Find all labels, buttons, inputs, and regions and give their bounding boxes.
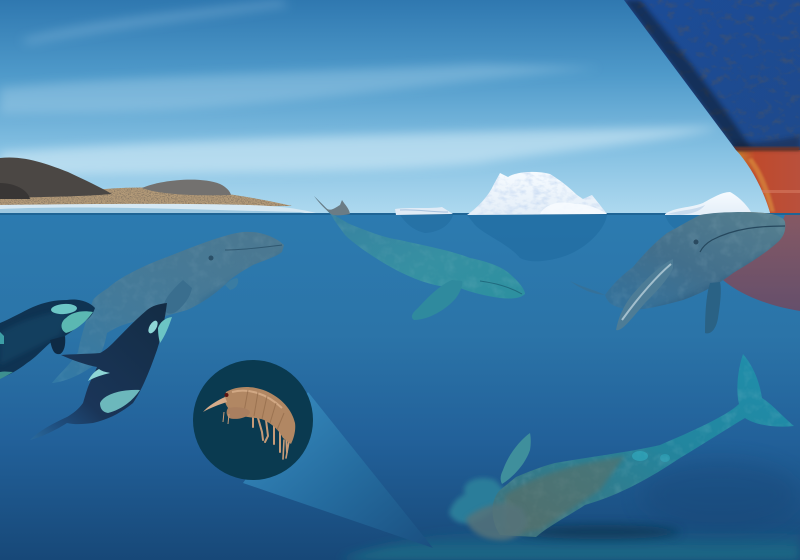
eye patch (51, 303, 77, 315)
eye patch (146, 319, 160, 335)
flipper (412, 280, 462, 320)
stomach remains (466, 504, 527, 540)
sky background (0, 0, 800, 214)
humpback whale right (570, 212, 790, 333)
ship hull below water (723, 215, 800, 311)
orca lower (30, 303, 172, 440)
iceberg: right (665, 192, 751, 232)
saddle patch (88, 369, 110, 381)
clouds: cirrus streaks (0, 0, 720, 178)
chin patch (62, 311, 93, 333)
tail above water (314, 196, 350, 215)
rear flipper (705, 282, 721, 333)
magnifier cone to krill (243, 392, 433, 548)
sea background (0, 213, 800, 560)
chin patch (158, 317, 172, 343)
front flipper (616, 259, 673, 330)
flipper (501, 433, 531, 484)
saddle patch (0, 332, 4, 344)
icon: amphipod (203, 387, 295, 459)
iceberg: large (467, 170, 607, 261)
ship hull above water (622, 0, 800, 216)
orca left (0, 299, 95, 379)
diving whale centre (314, 196, 526, 320)
gray whale left (50, 230, 290, 385)
ice shelf at waterline (0, 204, 316, 214)
belly patch (100, 390, 140, 413)
dead whale seabed sediment (340, 460, 800, 560)
iceberg: small flat (395, 207, 453, 233)
land: rocky shore (0, 157, 295, 209)
pectoral fin (163, 280, 192, 314)
krill inset circle (193, 360, 313, 480)
dead whale on seabed (449, 354, 795, 540)
pectoral fin (50, 336, 65, 354)
